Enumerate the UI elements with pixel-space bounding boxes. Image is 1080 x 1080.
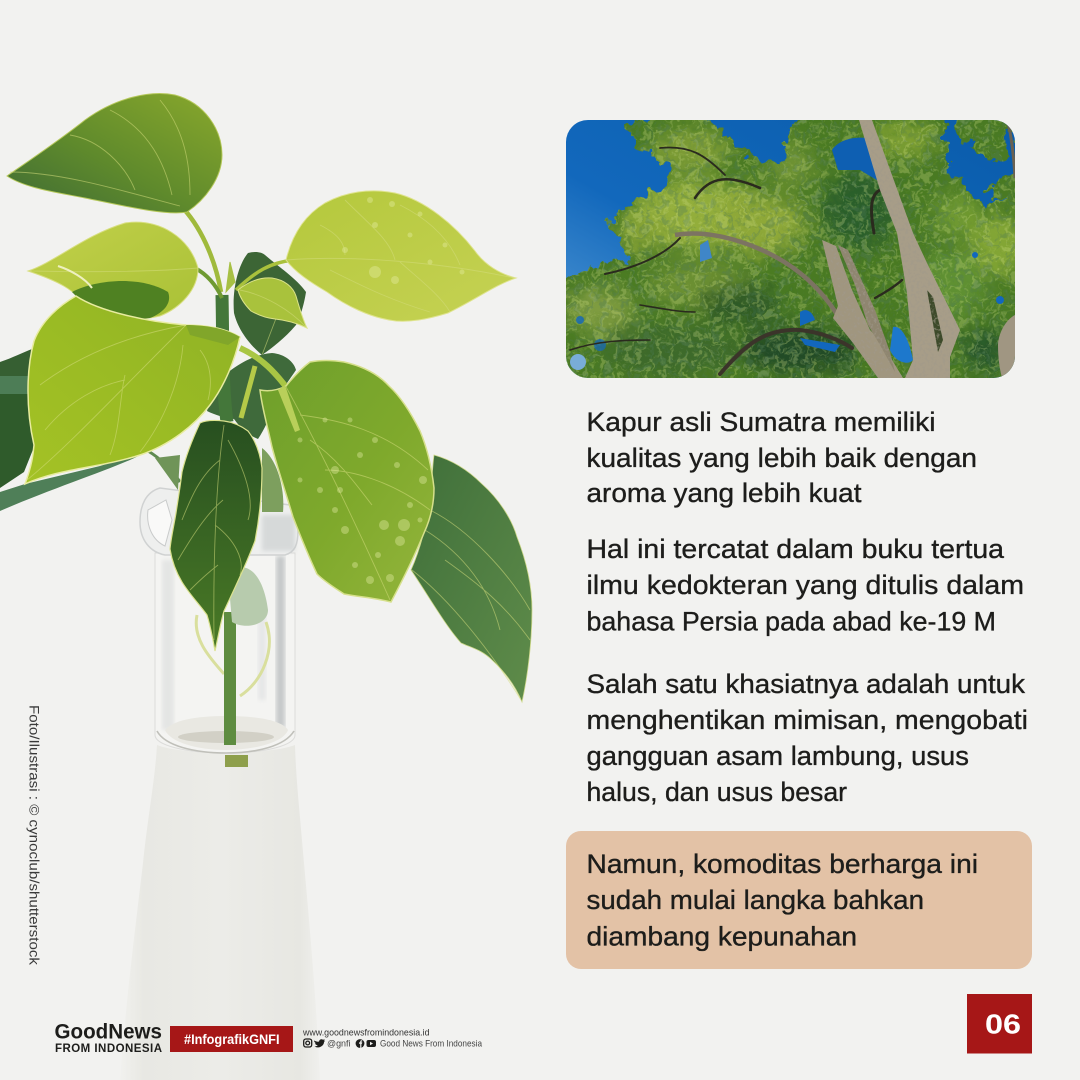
branches xyxy=(570,147,902,374)
footer: GoodNews logo: GoodNews xyxy=(54,1020,162,1044)
footer: website and social handles: Good News From Indonesia xyxy=(380,1038,483,1050)
back leaf: dark lower xyxy=(207,353,296,439)
body text: block 1: kualitas yang lebih baik dengan xyxy=(586,443,977,473)
leaf: dark centre hanging into bottle xyxy=(170,420,262,651)
body text: block 2: ilmu kedokteran yang ditulis dalam xyxy=(586,570,1024,600)
callout: scarcity warning: sudah mulai langka bahkan xyxy=(586,885,924,915)
body text: block 1: aroma yang lebih kuat xyxy=(586,478,862,508)
far left leaves xyxy=(0,349,180,511)
body text: block 2 xyxy=(586,534,1024,636)
page number xyxy=(967,994,1032,1054)
sky xyxy=(566,120,1015,378)
footer: hashtag badge xyxy=(170,1026,293,1052)
water drops xyxy=(298,418,427,584)
body text: block 3 xyxy=(586,669,1028,807)
icon: youtube xyxy=(366,1040,376,1047)
body text: block 3: menghentikan mimisan, mengobati xyxy=(586,705,1028,735)
body text: block 3: halus, dan usus besar xyxy=(586,777,847,807)
leaf: small yellow centre xyxy=(238,278,307,328)
leaf: far right dark xyxy=(411,455,532,702)
bottle rim xyxy=(140,488,298,555)
page number: 06 xyxy=(985,1008,1021,1040)
leaf: top right yellow xyxy=(286,191,516,321)
leaf: yellow-green left xyxy=(28,222,198,319)
back leaf: dark upper xyxy=(234,252,306,355)
sky gaps in canopy xyxy=(570,138,1004,370)
stems xyxy=(180,205,295,422)
body text: block 1: Kapur asli Sumatra memiliki xyxy=(586,407,936,437)
photo: plant with leaves xyxy=(0,94,532,702)
back leaf: small green behind bottle xyxy=(262,448,283,512)
footer: GoodNews logo xyxy=(54,1020,162,1055)
leaf: big bright left xyxy=(25,296,240,484)
footer: website and social handles xyxy=(302,1028,483,1050)
footer: website and social handles: @gnfi xyxy=(327,1038,350,1050)
roots and stem in the water xyxy=(196,615,269,696)
footer: website and social handles: www.goodnewsfromindonesia.id xyxy=(302,1028,430,1038)
body text: block 3: gangguan asam lambung, usus xyxy=(586,741,969,771)
callout: scarcity warning xyxy=(566,831,1032,969)
body text: block 3: Salah satu khasiatnya adalah untuk xyxy=(586,669,1026,699)
body text: block 2: Hal ini tercatat dalam buku tertua xyxy=(586,534,1004,564)
icon: facebook xyxy=(356,1039,364,1048)
tree trunks xyxy=(815,120,1015,378)
water drops xyxy=(342,197,464,284)
callout: scarcity warning: Namun, komoditas berharga ini xyxy=(586,849,978,879)
credit: photo source: Foto/Ilustrasi : © cynoclub/shutterstock xyxy=(26,705,42,965)
callout: scarcity warning: diambang kepunahan xyxy=(586,922,857,952)
photo: camphor tree against blue sky xyxy=(566,120,1015,378)
photo: glass bottle xyxy=(120,488,320,1080)
icon: instagram xyxy=(304,1039,312,1047)
body text: block 1 xyxy=(586,407,977,508)
bottle body with water xyxy=(120,745,320,1080)
footer: hashtag badge: #InfografikGNFI xyxy=(184,1032,280,1047)
foliage xyxy=(566,120,1015,378)
footer: GoodNews logo: FROM INDONESIA xyxy=(55,1043,162,1055)
icon: twitter xyxy=(314,1039,325,1047)
leaf: big right with drops xyxy=(260,360,434,602)
body text: block 2: bahasa Persia pada abad ke-19 M xyxy=(586,606,996,636)
leaf: top dark green xyxy=(7,94,222,213)
